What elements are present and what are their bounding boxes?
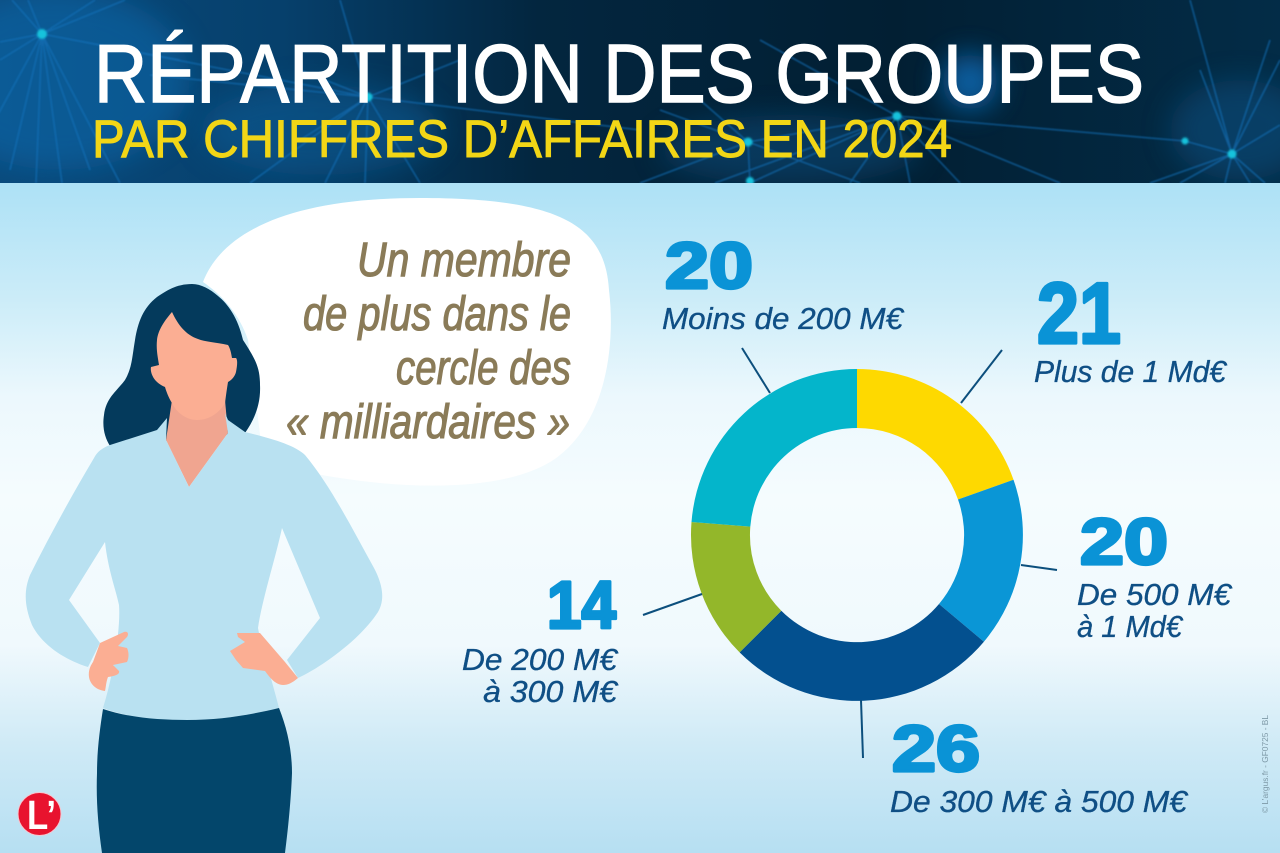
skirt [97,708,292,853]
segment: 200 à 300 M€ [691,522,781,652]
label: 200 à 300 M€ [462,568,619,709]
label: plus de 1 Md€: 21 [1037,266,1121,362]
label: 300 à 500 M€: De 300 M€ à 500 M€ [890,784,1189,819]
label: 500 M€ à 1 Md€ [1077,505,1233,644]
hair [103,284,260,446]
label: 200 à 300 M€: De 200 M€ [462,642,619,677]
quote text: Un membre [357,234,571,287]
illustration: woman [26,284,382,853]
header banner [0,0,1280,185]
label: 300 à 500 M€ [890,712,1189,819]
segment: 300 à 500 M€ [740,604,984,701]
label: 500 M€ à 1 Md€: à 1 Md€ [1077,609,1184,644]
face [151,312,237,420]
quote text: cercle des [396,342,571,395]
quote text [286,234,571,449]
label: moins de 200 M€: Moins de 200 M€ [662,301,905,336]
label: plus de 1 Md€ [1034,266,1228,389]
logo: L’ [27,792,56,838]
quote text: de plus dans le [303,288,571,341]
label: 200 à 300 M€: à 300 M€ [483,674,619,709]
credit: © L’argus.fr - GF0725 - BL [1261,714,1270,813]
segment: plus de 1 Md€ [857,369,1014,500]
title: RÉPARTITION DES GROUPES [94,27,1144,120]
label: plus de 1 Md€: Plus de 1 Md€ [1034,354,1228,389]
speech bubble [203,198,611,486]
label: moins de 200 M€ [662,229,905,336]
right hand [230,633,298,685]
segment: moins de 200 M€ [692,369,857,527]
subtitle: PAR CHIFFRES D’AFFAIRES EN 2024 [92,110,952,169]
quote text: « milliardaires » [286,396,570,449]
label: 500 M€ à 1 Md€: De 500 M€ [1077,577,1233,612]
leader lines [643,348,1057,758]
label: moins de 200 M€: 20 [665,229,753,302]
light blue panel background [0,183,1280,853]
label: 300 à 500 M€: 26 [892,712,980,785]
neck [166,400,228,487]
left hand [89,632,128,691]
shirt [26,413,382,720]
label: 500 M€ à 1 Md€: 20 [1080,505,1168,578]
donut chart [691,369,1023,701]
label: 200 à 300 M€: 14 [547,568,616,643]
segment: 500 M€ à 1 Md€ [939,480,1023,642]
